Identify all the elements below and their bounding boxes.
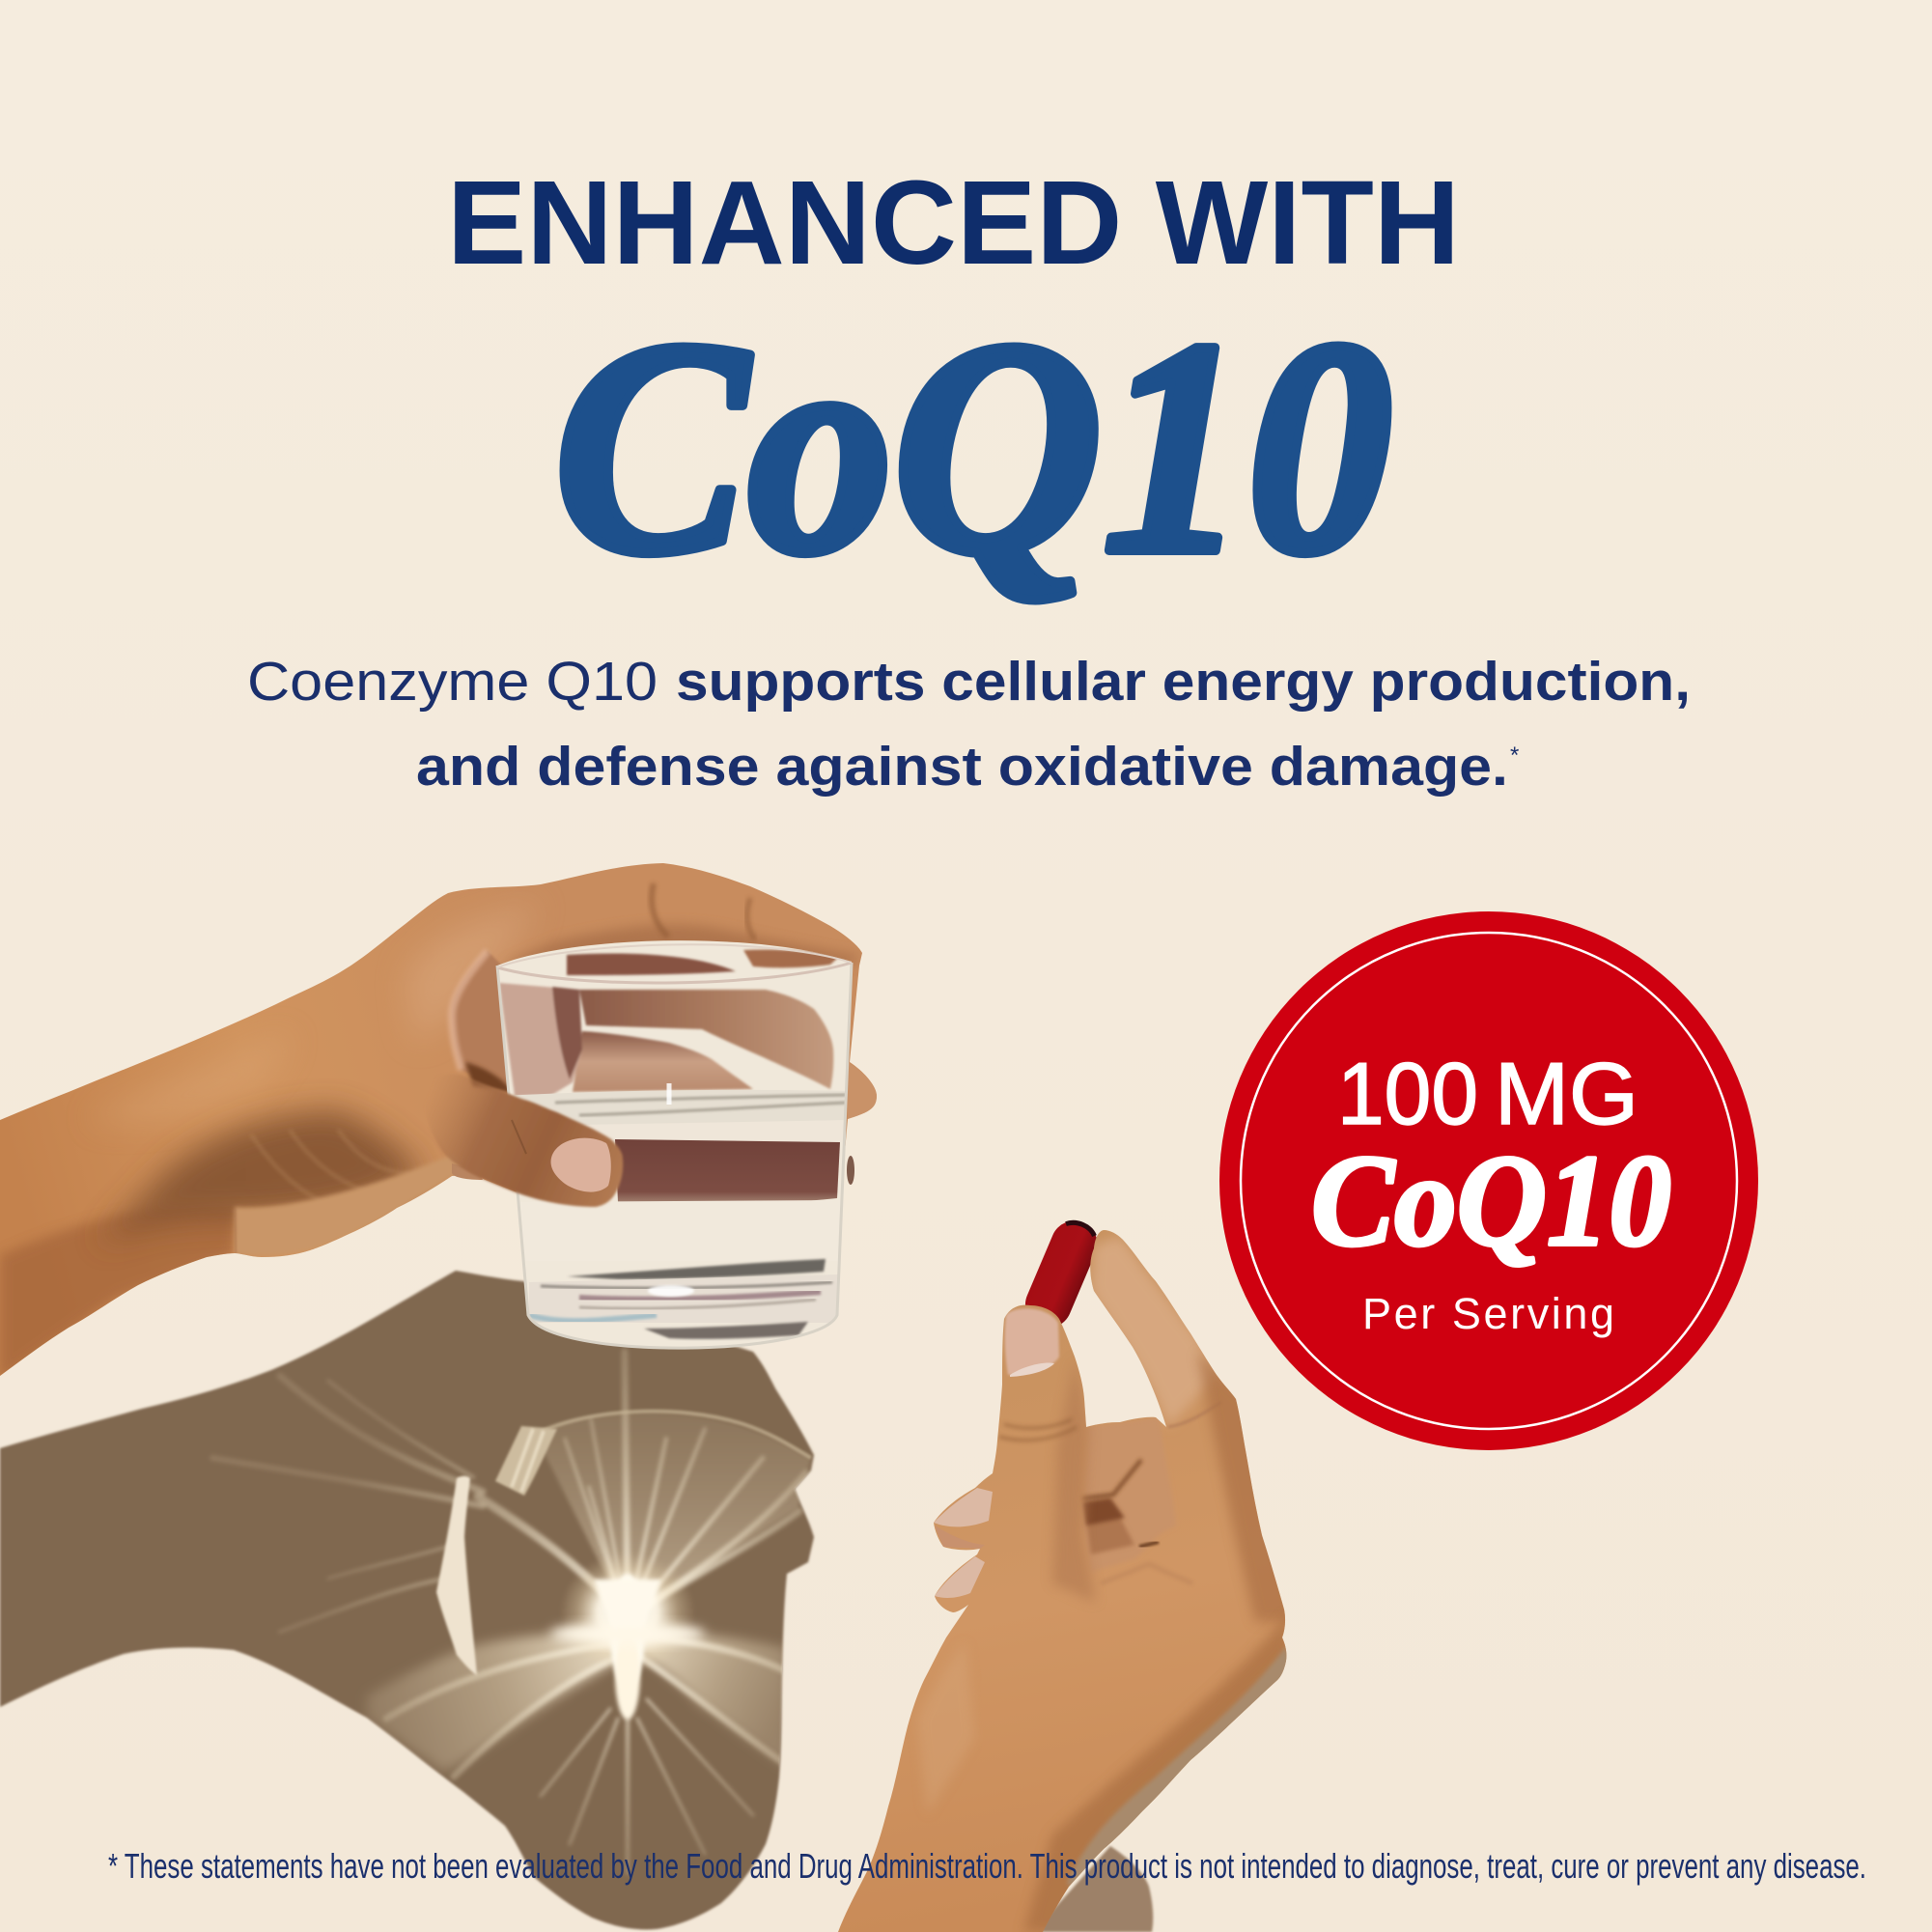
curled fingers <box>1120 1417 1161 1450</box>
wrist shadow <box>97 1110 425 1246</box>
refracted arc <box>541 1412 811 1458</box>
heading: enhanced with: ENHANCED WITH <box>447 157 1460 290</box>
badge: 100 mg CoQ10 per serving <box>1219 911 1758 1450</box>
glass outline and rim <box>497 963 852 1348</box>
badge amount: MG <box>1495 1046 1638 1143</box>
description text: and defense against oxidative damage. <box>416 736 1508 798</box>
refracted light shards <box>436 1426 557 1675</box>
right hand holding softgel <box>838 1214 1299 1932</box>
finger nails <box>934 1488 993 1526</box>
upper fan <box>546 1414 811 1593</box>
lower right wing <box>637 1630 787 1767</box>
index finger <box>1091 1236 1217 1427</box>
nub behind glass <box>847 1156 854 1185</box>
clear water <box>618 1200 817 1205</box>
description text <box>247 651 1691 798</box>
palm inner edge <box>453 952 506 1085</box>
refracted fingers <box>499 949 840 1096</box>
description text: supports cellular energy production, <box>676 651 1691 713</box>
shadow of hand and glass on wall <box>0 1271 1153 1932</box>
badge amount <box>1337 1046 1638 1143</box>
individual rays <box>212 1352 806 1873</box>
outer knuckle shading <box>1195 1354 1285 1625</box>
badge per serving: Per Serving <box>1362 1289 1614 1338</box>
shadow of right wrist <box>1033 1846 1153 1932</box>
thumb on glass <box>424 1074 623 1207</box>
description text: * <box>1510 742 1519 769</box>
heading: CoQ10: CoQ10 <box>554 277 1392 617</box>
thumbnail <box>1005 1308 1059 1375</box>
crease highlights <box>252 1132 398 1197</box>
light rays through glass <box>212 1352 811 1873</box>
glass base stripes <box>567 1259 826 1279</box>
waterline <box>515 1089 845 1124</box>
heel shadow band <box>1023 1612 1294 1932</box>
back of hand lower left <box>921 1659 971 1799</box>
fingers right of glass <box>848 1062 877 1119</box>
lower left wing <box>367 1630 628 1772</box>
thumbnail <box>551 1138 611 1192</box>
thumb shading <box>1052 1357 1096 1603</box>
arm highlight <box>140 1070 237 1114</box>
bright burst <box>564 1558 691 1655</box>
badge CoQ10: CoQ10 <box>1311 1129 1671 1274</box>
small fingertip under thumb <box>452 1163 483 1180</box>
hand back highlight <box>407 913 519 1027</box>
badge amount: 100 <box>1337 1046 1478 1143</box>
description text: Coenzyme Q10 <box>247 651 658 713</box>
softgel capsule <box>1018 1214 1105 1335</box>
finger top shading <box>502 925 862 966</box>
drinking glass with water <box>497 940 852 1352</box>
brown band seen through water <box>615 1139 840 1205</box>
underside of forearm <box>0 1205 235 1381</box>
left hand and arm <box>0 863 877 1381</box>
palm heel <box>233 1159 454 1257</box>
